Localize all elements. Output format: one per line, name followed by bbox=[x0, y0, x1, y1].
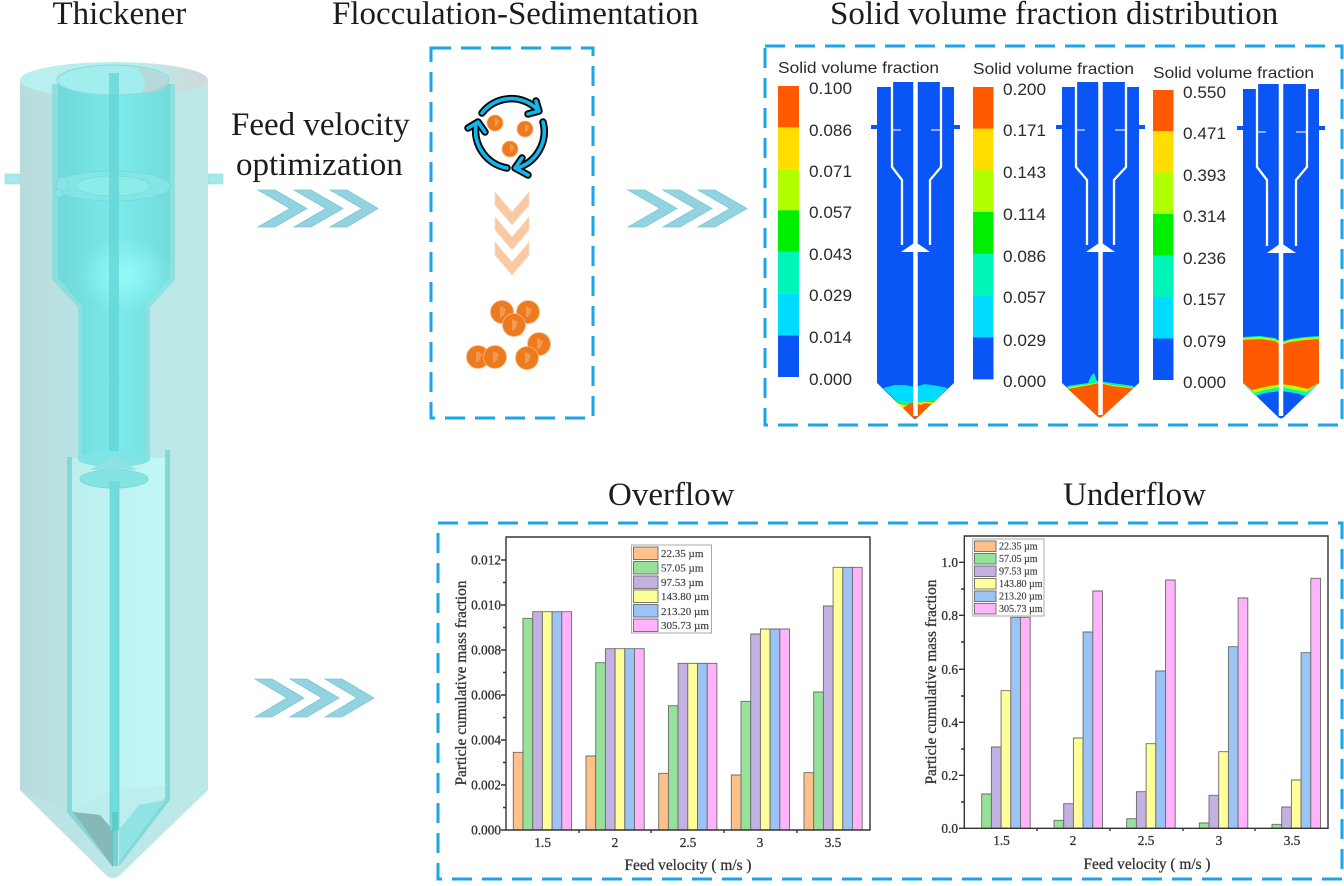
underflow x tick labels: 3.5 bbox=[1284, 833, 1301, 848]
overflow legend: 97.53 µm bbox=[661, 577, 704, 589]
underflow y tick labels: 0.2 bbox=[941, 768, 958, 783]
underflow x tick labels: 2 bbox=[1070, 833, 1076, 848]
arrow: flocculation to distribution bbox=[628, 190, 747, 227]
colorbar 1: 0.071 bbox=[809, 163, 852, 181]
underflow y tick labels: 0.4 bbox=[941, 715, 958, 730]
feed inlet nozzle bbox=[55, 177, 70, 197]
underflow y axis title: Particle cumulative mass fraction bbox=[923, 579, 940, 784]
internal white walls bbox=[1076, 82, 1126, 415]
overflow bars: 97.53 um bbox=[533, 606, 833, 830]
colorbar 1: 0.043 bbox=[809, 246, 852, 264]
internal white walls bbox=[1257, 84, 1307, 416]
colorbar 1: 0.086 bbox=[809, 122, 852, 140]
underflow x tick labels: 3 bbox=[1216, 833, 1223, 848]
overflow legend: 57.05 µm bbox=[661, 562, 704, 574]
overflow y axis title: Particle cumulative mass fraction bbox=[453, 580, 470, 786]
cone dark facet bbox=[73, 812, 113, 867]
upper feed well interior bbox=[58, 84, 170, 456]
cone shading bbox=[20, 785, 208, 878]
overflow bars: 213.20 um bbox=[552, 567, 852, 830]
overflow y tick labels: 0.000 bbox=[471, 822, 501, 838]
label: Feed velocity optimization: optimization bbox=[236, 147, 403, 183]
thickener 3D illustration bbox=[5, 62, 223, 878]
colorbar 1: 0.014 bbox=[809, 329, 852, 347]
overflow legend: 22.35 µm bbox=[661, 548, 704, 560]
colorbar 1: Solid volume fraction bbox=[778, 60, 939, 77]
high concentration band bbox=[1243, 336, 1319, 396]
colorbar 1: 0.000 bbox=[809, 371, 852, 389]
feed well rim bbox=[57, 65, 169, 95]
underflow x tick labels: 2.5 bbox=[1138, 833, 1155, 848]
settled solids bands bbox=[1067, 373, 1134, 418]
colorbar 3: 0.393 bbox=[1183, 167, 1226, 185]
overflow legend: 305.73 µm bbox=[661, 620, 709, 632]
overflow x tick labels: 2.5 bbox=[680, 835, 697, 850]
icon: dispersed particles bbox=[487, 115, 533, 157]
colorbar 2 bbox=[973, 61, 1134, 391]
underflow legend: 97.53 µm bbox=[999, 566, 1038, 578]
upper feed well wall bbox=[52, 84, 175, 460]
bar chart: overflow bbox=[453, 537, 870, 874]
colorbar 1: 0.057 bbox=[809, 204, 852, 222]
shaft tail bbox=[112, 812, 118, 866]
underflow y tick labels bbox=[941, 555, 958, 836]
colorbar 2: 0.000 bbox=[1003, 373, 1046, 391]
colorbar 3: 0.471 bbox=[1183, 125, 1226, 143]
underflow y tick labels: 0.8 bbox=[941, 608, 958, 623]
colorbar 2: Solid volume fraction bbox=[973, 61, 1134, 78]
underflow legend: 305.73 µm bbox=[999, 604, 1043, 615]
colorbar 3: 0.236 bbox=[1183, 250, 1226, 268]
central shaft lower bbox=[110, 482, 119, 830]
settled solids bands bbox=[883, 384, 948, 418]
bar chart: underflow bbox=[923, 536, 1328, 873]
overflow y tick labels: 0.012 bbox=[471, 552, 501, 568]
rim grey reflection bbox=[135, 67, 169, 94]
colorbar 3: 0.314 bbox=[1183, 208, 1226, 226]
top lid ellipse bbox=[20, 62, 208, 98]
colorbar 2: 0.200 bbox=[1003, 81, 1046, 99]
left baffle wall bbox=[67, 457, 113, 867]
icon: circulating arrows bbox=[468, 99, 544, 175]
colorbar 3: 0.157 bbox=[1183, 291, 1226, 309]
diffuser cone and plate bbox=[80, 455, 148, 488]
colorbar 2: 0.171 bbox=[1003, 122, 1046, 140]
upper well glow bbox=[77, 237, 173, 313]
outer vessel bbox=[20, 80, 208, 878]
underflow x axis title: Feed velocity ( m/s ) bbox=[1084, 856, 1210, 873]
contour 2 bbox=[1056, 82, 1145, 418]
overflow bars: 57.05 um bbox=[523, 618, 823, 830]
underflow y tick labels: 0.0 bbox=[941, 821, 958, 836]
panel: overflow and underflow charts bbox=[438, 523, 1342, 879]
underflow bars: 305.73 um bbox=[1020, 578, 1320, 828]
overflow bars: 143.80 um bbox=[542, 567, 843, 830]
underflow axes frame bbox=[959, 536, 1328, 831]
underflow legend: 143.80 µm bbox=[999, 579, 1043, 590]
contour 3 bbox=[1237, 84, 1325, 418]
overflow legend: 143.80 µm bbox=[661, 591, 709, 603]
overflow x axis title: Feed velocity ( m/s ) bbox=[624, 857, 752, 874]
lower vessel light area bbox=[70, 458, 168, 866]
overflow bars: 22.35 um bbox=[513, 752, 814, 830]
underflow bars: 143.80 um bbox=[1001, 691, 1301, 828]
overflow y tick labels: 0.010 bbox=[471, 598, 501, 612]
colorbar 3: 0.550 bbox=[1183, 84, 1226, 102]
panel: flocculation-sedimentation bbox=[431, 48, 593, 418]
colorbar 2: 0.086 bbox=[1003, 248, 1046, 266]
central shaft upper bbox=[109, 73, 119, 460]
overflow x tick labels bbox=[534, 835, 842, 850]
icon: flocculated particle clusters bbox=[466, 300, 550, 370]
underflow bars: 57.05 um bbox=[982, 794, 1282, 828]
overflow y tick labels: 0.008 bbox=[471, 642, 501, 658]
colorbar 1: 0.029 bbox=[809, 287, 852, 305]
overflow legend: 213.20 µm bbox=[661, 606, 709, 618]
colorbar 1 bbox=[778, 60, 939, 389]
underflow x tick labels: 1.5 bbox=[993, 833, 1010, 848]
overflow x tick labels: 1.5 bbox=[534, 835, 551, 850]
colorbar 2: 0.143 bbox=[1003, 164, 1046, 182]
arrow: downward chevrons bbox=[495, 192, 529, 275]
underflow legend: 57.05 µm bbox=[999, 554, 1038, 565]
annular feed ring bbox=[55, 171, 171, 201]
colorbar 2: 0.057 bbox=[1003, 289, 1046, 307]
underflow y tick labels: 0.6 bbox=[941, 662, 958, 677]
internal white walls bbox=[892, 82, 941, 416]
heading: Underflow: Underflow bbox=[1063, 477, 1206, 513]
underflow x tick labels bbox=[993, 833, 1301, 848]
panel: solid volume fraction distribution bbox=[765, 46, 1342, 425]
overflow y tick labels: 0.006 bbox=[471, 688, 501, 702]
heading: Overflow: Overflow bbox=[608, 477, 735, 513]
colorbar 3: 0.000 bbox=[1183, 374, 1226, 392]
underflow bars: 213.20 um bbox=[1011, 617, 1311, 828]
contour 1 bbox=[871, 82, 960, 419]
left and right feed pipes bbox=[5, 174, 223, 184]
overflow bars: 305.73 um bbox=[562, 567, 862, 830]
underflow legend: 213.20 µm bbox=[999, 592, 1043, 602]
colorbar 2: 0.114 bbox=[1003, 206, 1046, 224]
right baffle wall bbox=[119, 450, 170, 866]
underflow y tick labels: 1.0 bbox=[941, 555, 958, 570]
label: Feed velocity optimization bbox=[231, 107, 410, 183]
arrow: thickener to overflow and underflow bbox=[255, 679, 374, 717]
label: Feed velocity optimization: Feed velocity bbox=[231, 107, 410, 143]
colorbar 2: 0.029 bbox=[1003, 332, 1046, 350]
overflow x tick labels: 2 bbox=[612, 835, 618, 850]
overflow x tick labels: 3.5 bbox=[825, 835, 842, 850]
overflow legend bbox=[632, 545, 712, 633]
cone teal facet bbox=[119, 800, 165, 862]
colorbar 3: Solid volume fraction bbox=[1153, 65, 1314, 82]
underflow legend bbox=[973, 539, 1044, 616]
overflow x tick labels: 3 bbox=[757, 835, 764, 850]
overflow y tick labels: 0.002 bbox=[471, 778, 501, 792]
overflow y tick labels: 0.004 bbox=[471, 732, 501, 748]
arrow: thickener to flocculation bbox=[258, 190, 378, 227]
overflow axes frame bbox=[501, 537, 870, 833]
overflow y tick labels bbox=[471, 552, 501, 838]
colorbar 3: 0.079 bbox=[1183, 333, 1226, 351]
underflow bars: 97.53 um bbox=[991, 747, 1291, 828]
colorbar 3 bbox=[1153, 65, 1314, 392]
colorbar 1: 0.100 bbox=[809, 80, 852, 98]
underflow legend: 22.35 µm bbox=[999, 542, 1038, 552]
neck bottom bbox=[78, 451, 150, 467]
